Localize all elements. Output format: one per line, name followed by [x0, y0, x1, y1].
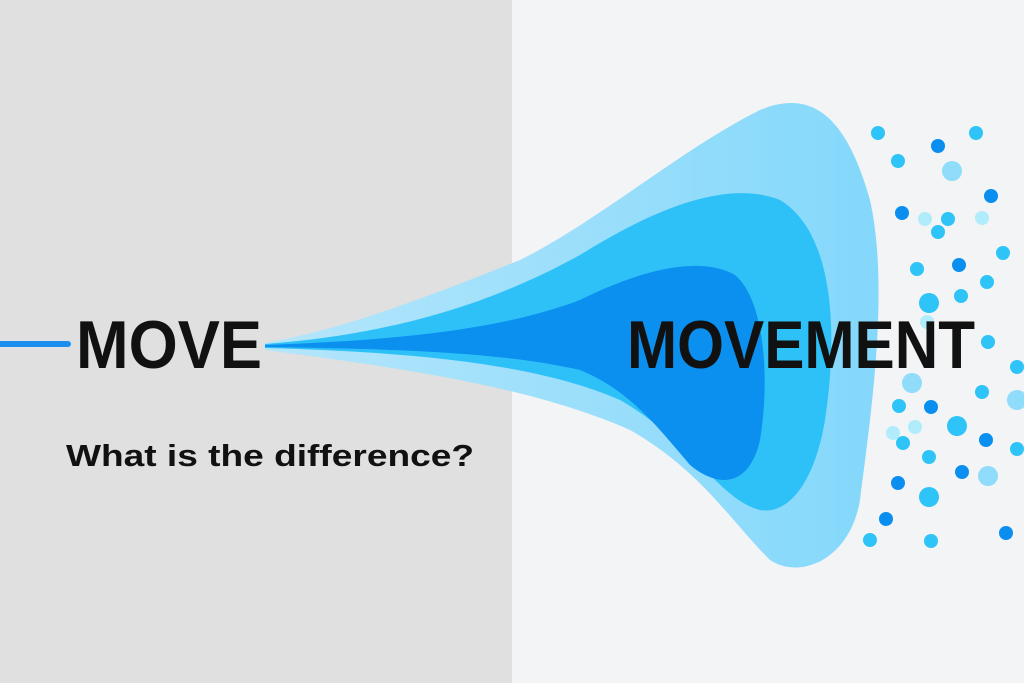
subtitle question: What is the difference? [66, 438, 474, 473]
title: MOVEMENT: MOVEMENT [627, 307, 975, 383]
blue line [0, 341, 68, 347]
particle dots [863, 126, 1024, 548]
funnel shape [265, 103, 879, 568]
left background panel [0, 0, 512, 683]
right background panel [512, 0, 1024, 683]
title: MOVE: MOVE [76, 307, 262, 383]
